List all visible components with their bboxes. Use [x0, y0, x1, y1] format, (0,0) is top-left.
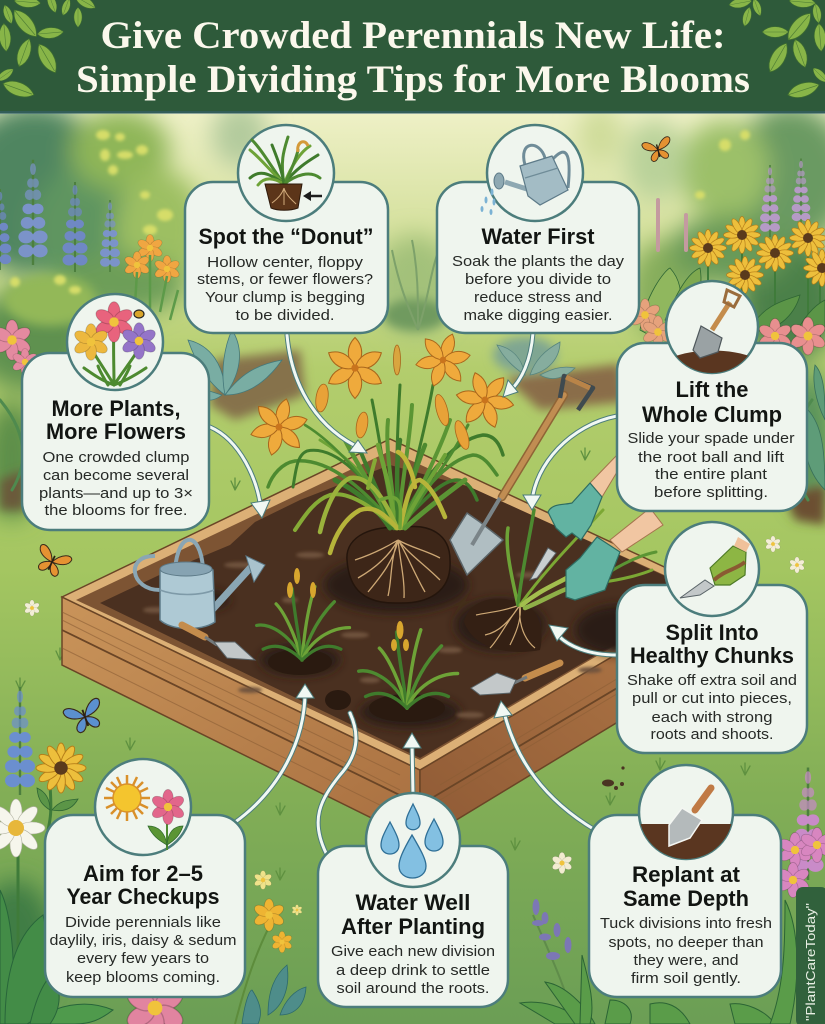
icon: watering can — [480, 145, 569, 215]
gardening hands dividing a plant — [464, 455, 663, 652]
hand trowel left — [182, 625, 255, 660]
icon: flower bunch — [73, 302, 157, 385]
spade — [450, 376, 593, 575]
body text: can become several — [43, 467, 189, 484]
arrow: water first — [503, 333, 533, 397]
body text: daylily, iris, daisy & sedum — [50, 932, 236, 949]
arrow: lift — [523, 416, 617, 510]
icon: spade in soil — [676, 288, 748, 373]
body text: Tuck divisions into fresh — [600, 915, 772, 932]
body text: One crowded clump — [42, 449, 190, 466]
body text: every few years to — [77, 950, 209, 967]
heading — [630, 620, 794, 668]
body text: the entire plant — [655, 466, 768, 483]
body text — [628, 430, 794, 501]
body text: Soak the plants the day — [452, 253, 625, 270]
arrow: split — [549, 625, 617, 655]
icon: gloved hand with knife — [680, 537, 750, 598]
body text: soil around the roots. — [336, 980, 490, 997]
small replanted divisions — [257, 568, 458, 722]
icon: corner leaves right — [728, 0, 825, 101]
body text — [39, 449, 193, 519]
heading — [623, 862, 749, 911]
heading: Aim for 2–5 — [83, 861, 203, 886]
butterflies — [32, 136, 675, 736]
heading: Whole Clump — [642, 402, 782, 427]
icon: plant in pot — [250, 137, 322, 210]
heading — [341, 890, 485, 939]
icon: water drops — [381, 804, 443, 878]
watermark: "PlantCareToday" — [803, 903, 818, 1021]
icon: sun and flower — [104, 775, 186, 850]
heading: Same Depth — [623, 886, 749, 911]
body text: plants—and up to 3× — [39, 485, 193, 502]
body text: the root ball and lift — [638, 449, 785, 466]
title: Give Crowded Perennials New Life: — [100, 14, 726, 57]
panel: water first — [437, 125, 639, 333]
body text: Give each new division — [331, 943, 495, 960]
heading: Split Into — [666, 620, 758, 645]
arrow: water well center — [403, 733, 421, 795]
body text — [197, 254, 373, 324]
icon: corner leaves left — [0, 0, 98, 101]
body text: firm soil gently. — [631, 970, 741, 987]
body text: they were, and — [634, 952, 738, 969]
body text — [452, 253, 625, 324]
panel: split into healthy chunks — [617, 522, 807, 753]
body text: Shake off extra soil and — [627, 672, 797, 689]
heading — [46, 396, 186, 444]
watering can in the bed — [135, 540, 265, 629]
arrow: water well left — [318, 713, 356, 853]
heading: More Plants, — [52, 396, 180, 421]
body text: before splitting. — [654, 484, 768, 501]
body text: spots, no deeper than — [608, 934, 764, 951]
panel: more plants — [22, 294, 209, 530]
heading: Lift the — [676, 377, 748, 402]
title: Simple Dividing Tips for More Blooms — [76, 58, 750, 101]
body text: pull or cut into pieces, — [632, 690, 792, 707]
background flowers top right — [629, 158, 825, 490]
body text: Divide perennials like — [65, 914, 221, 931]
body text: the blooms for free. — [44, 502, 188, 519]
body text: make digging easier. — [464, 307, 612, 324]
panel: replant at same depth — [589, 765, 781, 997]
background flowers top left — [0, 160, 575, 400]
body text — [600, 915, 772, 987]
body text: roots and shoots. — [650, 726, 774, 743]
body text: Hollow center, floppy — [207, 254, 364, 271]
main daylily clump with root ball — [244, 325, 525, 603]
body text: keep blooms coming. — [66, 969, 220, 986]
heading: Replant at — [632, 862, 741, 887]
body text: reduce stress and — [474, 289, 602, 306]
header banner — [0, 0, 825, 114]
panel: spot the donut — [185, 125, 388, 333]
watermark — [796, 887, 825, 1024]
arrow: more plants — [210, 427, 270, 518]
background flowers bottom — [0, 536, 825, 1024]
heading: Year Checkups — [66, 884, 220, 909]
body text: Your clump is begging — [205, 289, 365, 306]
heading — [66, 861, 220, 909]
body text: Slide your spade under — [628, 430, 794, 447]
hand trowel right — [471, 663, 560, 695]
heading: After Planting — [341, 914, 485, 939]
panel: lift the whole clump — [617, 281, 807, 511]
body text: a deep drink to settle — [336, 962, 490, 979]
panel: aim for checkups — [45, 759, 245, 997]
panel: water well after planting — [318, 793, 508, 1007]
title — [76, 14, 750, 101]
heading: Water Well — [356, 890, 470, 915]
raised garden bed — [62, 439, 720, 842]
body text — [331, 943, 495, 997]
inner wall and soil — [76, 451, 704, 760]
heading: Spot the “Donut” — [198, 224, 374, 249]
body text: stems, or fewer flowers? — [197, 271, 373, 288]
arrow: spot to clump — [287, 335, 367, 453]
heading — [642, 377, 782, 427]
heading: More Flowers — [46, 419, 186, 444]
body text: before you divide to — [465, 271, 611, 288]
heading: Healthy Chunks — [630, 643, 794, 668]
icon: trowel in soil — [640, 784, 732, 859]
body text — [627, 672, 797, 743]
arrow: aim — [234, 684, 314, 823]
arrow: replant — [494, 701, 595, 830]
body text: each with strong — [652, 709, 772, 726]
heading: Water First — [482, 224, 595, 249]
body text: to be divided. — [236, 307, 334, 324]
body text — [50, 914, 236, 986]
